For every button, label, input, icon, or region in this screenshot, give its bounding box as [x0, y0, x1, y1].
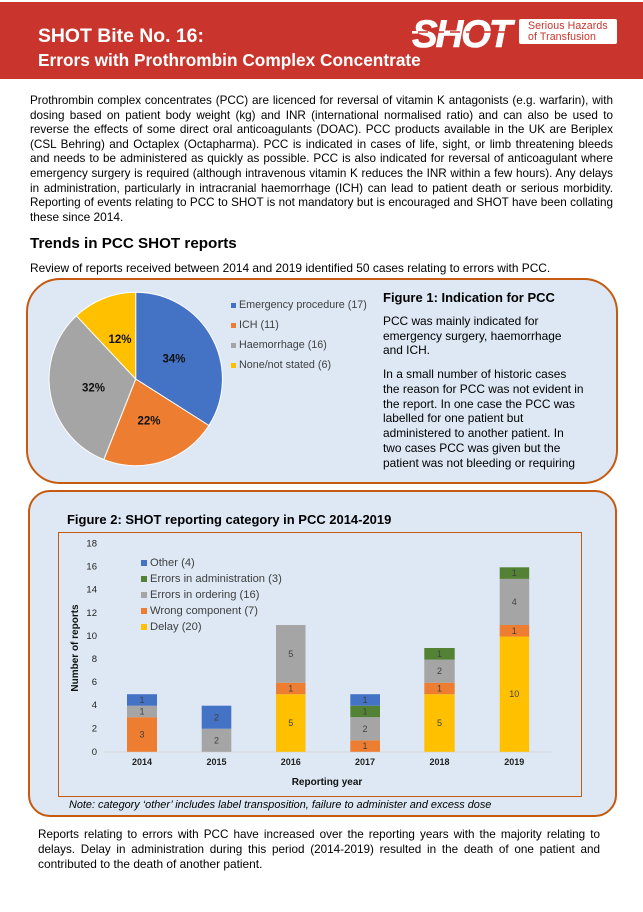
- intro paragraph: dosing based on patient body weight (kg) and INR (international normalised ratio) and can also be used to: [30, 109, 613, 122]
- stacked bar chart: 1: [139, 695, 145, 705]
- stacked bar chart: 16: [86, 562, 97, 573]
- intro paragraph: Prothrombin complex concentrates (PCC) are licenced for reversal of vitamin K antagonists (e.g. warfarin), with: [30, 94, 613, 107]
- stacked bar chart: 2: [362, 724, 368, 734]
- logo: SHOT: SHOT: [412, 12, 510, 56]
- subtitle: Errors with Prothrombin Complex Concentrate: [38, 50, 421, 70]
- stacked bar chart: 2: [214, 736, 219, 746]
- stacked bar chart: 2: [92, 723, 97, 734]
- stacked bar chart: 2017: [355, 757, 375, 767]
- stacked bar chart: 1: [437, 684, 442, 694]
- stacked bar chart: 6: [92, 677, 97, 688]
- stacked bar chart: 2: [437, 666, 442, 676]
- intro paragraph: Reporting of events relating to PCC to SHOT is not mandatory but is encouraged and SHOT have been collating: [30, 196, 613, 209]
- stacked bar chart: 18: [86, 538, 97, 550]
- panel: figure 1: [26, 278, 618, 484]
- header banner: [0, 2, 643, 79]
- stacked bar chart: 1: [362, 741, 368, 751]
- figure 1 text: PCC was mainly indicated for: [383, 314, 539, 328]
- stacked bar chart: 8: [92, 654, 97, 665]
- stacked bar chart: 3: [139, 730, 145, 740]
- stacked bar chart: 1: [288, 684, 293, 694]
- closing paragraph: Reports relating to errors with PCC have increased over the reporting years with the majority relating to: [38, 828, 600, 841]
- stacked bar chart: 2015: [206, 757, 227, 767]
- pie chart: 32%: [82, 382, 105, 394]
- stacked bar chart: 1: [362, 706, 368, 716]
- bar chart legend: Wrong component (7): [150, 605, 258, 617]
- intro paragraph: emergency surgery is required (although intravenous vitamin K reduces the INR within a few hours). Any delays: [30, 167, 613, 180]
- pie legend: Emergency procedure (17): [239, 299, 367, 311]
- logo: Serious Hazards of Transfusion: of Transfusion: [528, 31, 596, 43]
- pie chart: 22%: [137, 416, 161, 428]
- stacked bar chart: 2014: [132, 757, 152, 767]
- pie chart: 34%: [162, 354, 186, 366]
- intro paragraph: reverse the effects of some direct oral anticoagulants (DOAC). PCC products available in the UK are Beriplex: [30, 123, 613, 136]
- title: SHOT Bite No. 16:: [38, 25, 204, 47]
- stacked bar chart: 2019: [504, 757, 524, 767]
- panel: figure 2: [28, 490, 617, 817]
- stacked bar chart: 0: [92, 747, 97, 758]
- stacked bar chart: 10: [509, 689, 519, 699]
- closing paragraph: delays. Delay in administration during this period (2014-2019) resulted in the death of one patient and: [38, 843, 600, 856]
- stacked bar chart: 5: [437, 718, 442, 728]
- closing paragraph: [38, 828, 600, 871]
- figure 1 text: the report. In one case the PCC was: [383, 397, 575, 411]
- stacked bar chart: 1: [512, 568, 517, 578]
- heading: trends: Trends in PCC SHOT reports: [30, 235, 237, 252]
- stacked bar chart: 4: [512, 597, 517, 607]
- figure 1 heading: Figure 1: Indication for PCC: [383, 290, 555, 304]
- review sentence: Review of reports received between 2014 and 2019 identified 50 cases relating to errors with PCC.: [30, 260, 550, 274]
- bar chart legend: Errors in ordering (16): [150, 589, 259, 601]
- chart frame: [58, 532, 582, 797]
- intro paragraph: and needs to be administered as quickly as possible. PCC is also indicated for reversal of anticoagulant where: [30, 152, 613, 165]
- stacked bar chart: 1: [139, 706, 145, 716]
- stacked bar chart: 2018: [429, 757, 450, 767]
- bar chart legend: Errors in administration (3): [150, 573, 282, 585]
- figure 1 text: [383, 314, 584, 470]
- figure 1 text: In a small number of historic cases: [383, 367, 566, 381]
- pie chart: 12%: [108, 334, 132, 346]
- stacked bar chart: 12: [86, 608, 97, 619]
- bar chart legend: [141, 557, 282, 633]
- logo: Serious Hazards of Transfusion: Serious Hazards: [528, 20, 608, 32]
- figure 1 text: labelled for one patient but: [383, 411, 523, 425]
- bar chart legend: Delay (20): [150, 621, 202, 633]
- stacked bar chart: 5: [288, 718, 293, 728]
- stacked bar chart: Number of reports: [70, 604, 81, 692]
- stacked bar chart: 2: [214, 712, 219, 722]
- figure 1 text: emergency surgery, haemorrhage: [383, 329, 561, 343]
- stacked bar chart: 14: [86, 585, 97, 596]
- logo: Serious Hazards of Transfusion: [519, 19, 617, 44]
- figure 2 heading: Figure 2: SHOT reporting category in PCC 2014-2019: [67, 512, 391, 527]
- figure 1 text: two cases PCC was given but the: [383, 441, 560, 455]
- pie legend: [231, 299, 367, 371]
- intro paragraph: these since 2014.: [30, 210, 123, 224]
- note: Note: category ‘other’ includes label transposition, failure to administer and excess dose: [69, 799, 491, 811]
- stacked bar chart: 1: [512, 626, 517, 636]
- stacked bar chart: 2016: [281, 757, 301, 767]
- closing paragraph: contributed to the death of another patient.: [38, 857, 262, 871]
- figure 1 text: the reason for PCC was not evident in: [383, 382, 584, 396]
- pie legend: None/not stated (6): [239, 359, 331, 371]
- stacked bar chart: 10: [86, 631, 97, 642]
- stacked bar chart: 5: [288, 649, 293, 659]
- stacked bar chart: 1: [437, 649, 442, 659]
- stacked bar chart: 1: [362, 695, 368, 705]
- intro paragraph: [30, 94, 613, 224]
- stacked bar chart: 4: [92, 700, 97, 711]
- figure 1 text: administered to another patient. In: [383, 426, 564, 440]
- stacked bar chart: Reporting year: [292, 777, 362, 788]
- intro paragraph: (CSL Behring) and Octaplex (Octapharma). PCC is indicated in cases of life, sight, or limb threatening bleeds: [30, 138, 613, 151]
- intro paragraph: in administration, particularly in intracranial haemorrhage (ICH) can lead to patient death or serious morbidity.: [30, 182, 613, 195]
- figure 1 text: patient was not bleeding or requiring: [383, 456, 575, 470]
- pie legend: ICH (11): [239, 319, 279, 331]
- bar chart legend: Other (4): [150, 557, 195, 569]
- figure 1 text: and ICH.: [383, 343, 430, 357]
- pie legend: Haemorrhage (16): [239, 339, 327, 351]
